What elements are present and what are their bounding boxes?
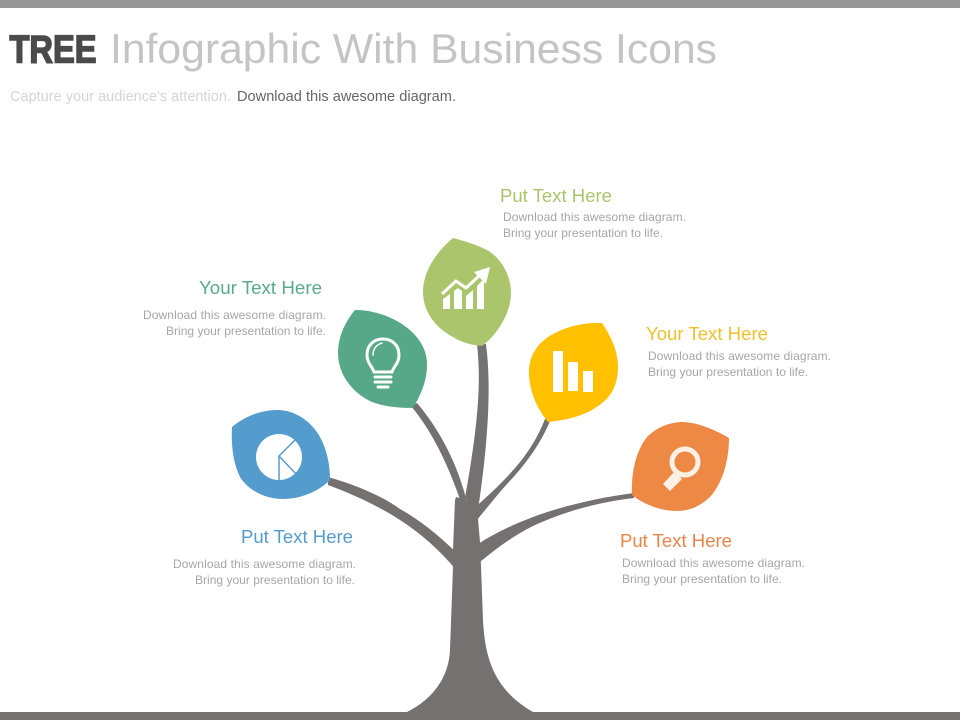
leaf: light green with growth chart icon xyxy=(423,238,511,346)
text block: yellow: Download this awesome diagram. xyxy=(648,349,831,363)
text block: blue: Bring your presentation to life. xyxy=(195,573,355,587)
title: Infographic With Business Icons xyxy=(110,25,717,72)
leaf: yellow with bar chart icon xyxy=(529,323,618,422)
title: TREE xyxy=(10,28,96,72)
text block: teal xyxy=(143,278,326,338)
text block: yellow xyxy=(646,324,831,379)
leaf: orange with magnifier icon xyxy=(632,422,729,511)
text block: orange xyxy=(620,531,805,586)
text block: teal: Your Text Here xyxy=(199,278,322,298)
branch: blue leaf xyxy=(328,477,456,570)
branch: yellow leaf xyxy=(474,419,550,521)
text block: orange: Download this awesome diagram. xyxy=(622,556,805,570)
icon: pie chart xyxy=(256,434,302,481)
text block: light green: Bring your presentation to life. xyxy=(503,226,663,240)
icon: light bulb xyxy=(367,339,399,387)
text block: orange: Put Text Here xyxy=(620,531,732,551)
subtitle: Capture your audience's attention. xyxy=(10,89,231,105)
text block: light green xyxy=(500,186,686,240)
text block: yellow: Your Text Here xyxy=(646,324,768,344)
leaf: teal with light bulb icon xyxy=(338,310,427,408)
text block: blue: Download this awesome diagram. xyxy=(173,557,356,571)
subtitle: Download this awesome diagram. xyxy=(237,89,456,105)
branch: light green leaf xyxy=(465,344,489,510)
tree trunk and branches xyxy=(328,344,634,712)
text block: teal: Bring your presentation to life. xyxy=(166,324,326,338)
text block: blue: Put Text Here xyxy=(241,527,353,547)
icon: growth chart xyxy=(442,267,490,309)
text block: orange: Bring your presentation to life. xyxy=(622,572,782,586)
branch: orange leaf xyxy=(478,493,634,562)
subtitle xyxy=(10,89,456,105)
text block: teal: Download this awesome diagram. xyxy=(143,308,326,322)
text block: light green: Put Text Here xyxy=(500,186,612,206)
icon: bar chart xyxy=(553,351,593,392)
text block: light green: Download this awesome diagram. xyxy=(503,210,686,224)
text block: yellow: Bring your presentation to life. xyxy=(648,365,808,379)
icon: magnifier xyxy=(663,449,698,491)
text block: blue xyxy=(173,527,356,587)
bottom bar xyxy=(0,712,960,720)
top bar xyxy=(0,0,960,8)
branch: teal leaf xyxy=(411,403,467,505)
trunk xyxy=(407,497,533,712)
leaf: blue with pie chart icon xyxy=(232,410,330,499)
